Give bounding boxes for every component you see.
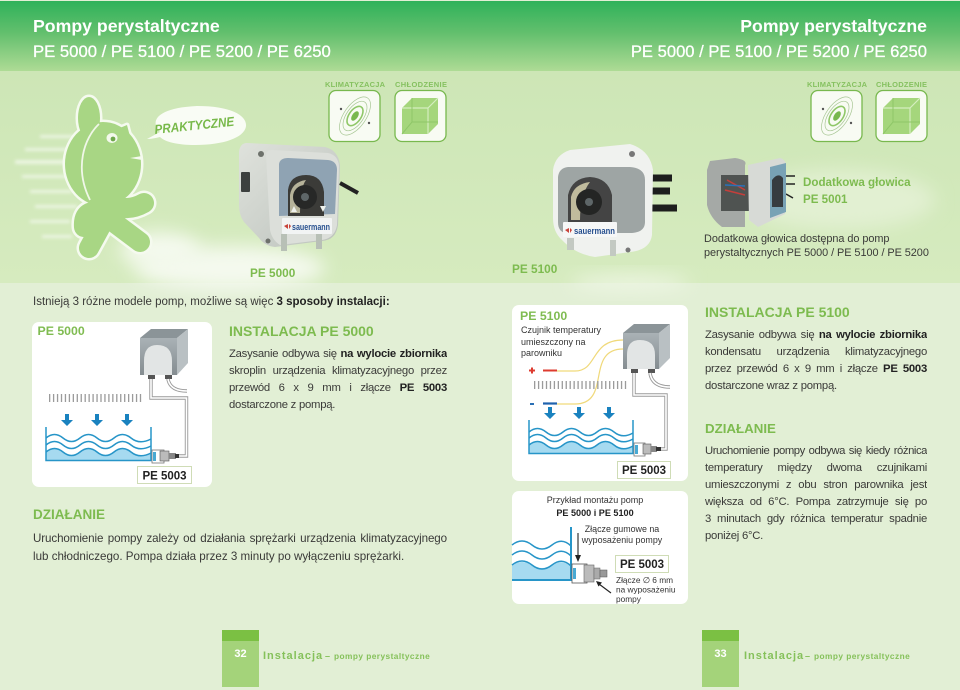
header band: [0, 1, 960, 71]
pump photo: PE 5000: [239, 143, 358, 251]
panel: mounting example: Złącze ∅ 6 mm: [616, 575, 673, 585]
panel: PE 5100 installation diagram: [512, 305, 688, 481]
arrows: [61, 414, 133, 426]
label PE 5003: PE 5003: [142, 470, 187, 482]
panel: PE 5100 installation diagram: parowniku: [521, 348, 562, 358]
water tray: [46, 427, 151, 460]
text: operation left: [33, 532, 447, 563]
pump box icon: [140, 329, 188, 379]
speech bubble: praktyczne: [147, 106, 246, 145]
text: installation PE 5100: [705, 329, 927, 392]
pump photo: PE 5000: sauermann: [292, 222, 330, 233]
heading: installation PE 5100: INSTALACJA PE 5100: [705, 304, 850, 320]
footer text right: –: [805, 651, 810, 661]
text: operation right: większa od 6°C. Pompa zatrzymuje się po: [705, 496, 927, 508]
label PE 5003: [618, 462, 670, 478]
category icons right: CHŁODZENIE: [876, 80, 927, 89]
footer page tab right: [702, 630, 739, 687]
title right: Pompy perystaltyczne: [740, 16, 927, 36]
category icons left: CHŁODZENIE: [395, 80, 447, 89]
footer text left: pompy perystaltyczne: [334, 651, 430, 661]
speech bubble: praktyczne: PRAKTYCZNE: [154, 114, 235, 137]
panel: mounting example: na wyposażeniu: [616, 584, 676, 594]
connector detail: [572, 564, 607, 583]
arrows: [544, 407, 615, 419]
arrow: 6 mm connector: [599, 584, 611, 593]
pump photo: PE 5100: sauermann: [574, 226, 615, 237]
intro text: Istnieją 3 różne modele pomp, możliwe są więc 3 sposoby instalacji:: [33, 296, 390, 308]
evaporator bars: [49, 394, 143, 402]
title right: PE 5000 / PE 5100 / PE 5200 / PE 6250: [631, 42, 927, 61]
panel: mounting example: [512, 491, 688, 604]
water tray detail: [512, 527, 571, 580]
connector: [634, 443, 661, 456]
footer text left: –: [325, 651, 330, 661]
panel: mounting example: PE 5000 i PE 5100: [556, 508, 634, 518]
text: installation PE 5000: skroplin urządzenia klimatyzacyjnego przez: [229, 365, 447, 377]
label PE 5003: [138, 466, 192, 484]
tubes: [634, 373, 670, 449]
text: installation PE 5100: przez przewód 6 x 9 mm i złącze PE 5003: [705, 363, 927, 375]
heading: extra head: Dodatkowa głowica: [803, 176, 911, 189]
evaporator bars: [534, 381, 628, 389]
label PE 5003: [616, 556, 668, 572]
text: installation PE 5100: kondensatu urządzenia klimatyzacyjnego: [705, 346, 927, 358]
pump photo: PE 5100: [553, 144, 677, 257]
pump box icon: [623, 324, 670, 373]
panel: mounting example: Złącze gumowe na: [585, 524, 659, 534]
title right: [631, 16, 927, 61]
text: operation right: umieszczonymi z obu stron parownika jest: [705, 479, 927, 491]
text: installation PE 5000: dostarczone z pompą.: [229, 399, 335, 411]
footer page tab right: 33: [714, 648, 727, 660]
panel: mounting example: pompy: [616, 594, 642, 604]
heading: installation PE 5000: INSTALACJA PE 5000: [229, 323, 374, 339]
text: extra head description: [704, 233, 929, 259]
title left: PE 5000 / PE 5100 / PE 5200 / PE 6250: [33, 42, 331, 61]
photo caption PE 5000: PE 5000: [250, 266, 295, 280]
footer text left: Instalacja: [263, 650, 323, 662]
photo: extra pump head PE 5001: [707, 158, 795, 227]
heading: extra head: PE 5001: [803, 192, 847, 206]
footer page tab left: [222, 630, 259, 687]
text: operation right: temperatury między dwoma czujnikami: [705, 462, 927, 474]
sensor wires: [557, 340, 623, 404]
tubes: [151, 379, 187, 456]
upper photo section: [0, 71, 960, 291]
text: installation PE 5000: [229, 348, 447, 411]
footer text right: Instalacja: [744, 650, 804, 662]
panel: PE 5000 installation diagram: PE 5000: [38, 324, 85, 338]
polarity marks: [529, 368, 557, 374]
footer page tab left: 32: [234, 648, 247, 660]
mascot: [15, 97, 144, 248]
category icons right: KLIMATYZACJA: [807, 80, 868, 89]
connector: [152, 450, 179, 463]
text: installation PE 5100: dostarczone wraz z pompą.: [705, 380, 837, 392]
text: operation right: 3 minutach gdy różnica temperatur spadnie: [705, 513, 927, 525]
text: extra head description: perystaltycznych PE 5000 / PE 5100 / PE 5200: [704, 247, 929, 259]
text: operation right: poniżej 6°C.: [705, 530, 763, 542]
heading: extra head: [803, 176, 911, 206]
label PE 5003: PE 5003: [622, 465, 666, 477]
text: operation right: Uruchomienie pompy odbywa się kiedy różnica: [705, 445, 927, 457]
panel: PE 5100 installation diagram: umieszczony na: [521, 337, 586, 347]
text: operation left: Uruchomienie pompy zależy od działania sprężarki urządzenia klimatyzacyjnego: [33, 532, 447, 545]
panel: mounting example: Przykład montażu pomp: [547, 495, 643, 505]
panel: PE 5100 installation diagram: PE 5100: [520, 309, 567, 323]
text: operation right: [705, 445, 927, 542]
text: installation PE 5000: Zasysanie odbywa się na wylocie zbiornika: [229, 348, 447, 360]
category icons left: [325, 80, 447, 142]
water tray: [529, 420, 633, 454]
panel: mounting example: wyposażeniu pompy: [581, 535, 663, 545]
text: extra head description: Dodatkowa głowica dostępna do pomp: [704, 233, 889, 245]
category icons right: [807, 80, 927, 142]
text: installation PE 5000: przewód 6 x 9 mm i złącze PE 5003: [229, 382, 447, 394]
panel: PE 5000 installation diagram: [32, 322, 212, 487]
text: installation PE 5100: Zasysanie odbywa się na wylocie zbiornika: [705, 329, 927, 341]
title left: [33, 16, 331, 61]
arrow: rubber connector: [577, 533, 579, 556]
photo caption PE 5100: PE 5100: [512, 262, 557, 276]
title left: Pompy perystaltyczne: [33, 16, 220, 36]
label PE 5003: PE 5003: [620, 559, 664, 571]
text: operation left: lub chłodniczego. Pompa działa przez 3 minuty po wyłączeniu sprężarki.: [33, 550, 404, 563]
heading: operation right: DZIAŁANIE: [705, 421, 776, 436]
footer text right: pompy perystaltyczne: [814, 651, 910, 661]
category icons left: KLIMATYZACJA: [325, 80, 386, 89]
heading: operation left: DZIAŁANIE: [33, 507, 105, 522]
panel: PE 5100 installation diagram: Czujnik temperatury: [521, 325, 602, 335]
